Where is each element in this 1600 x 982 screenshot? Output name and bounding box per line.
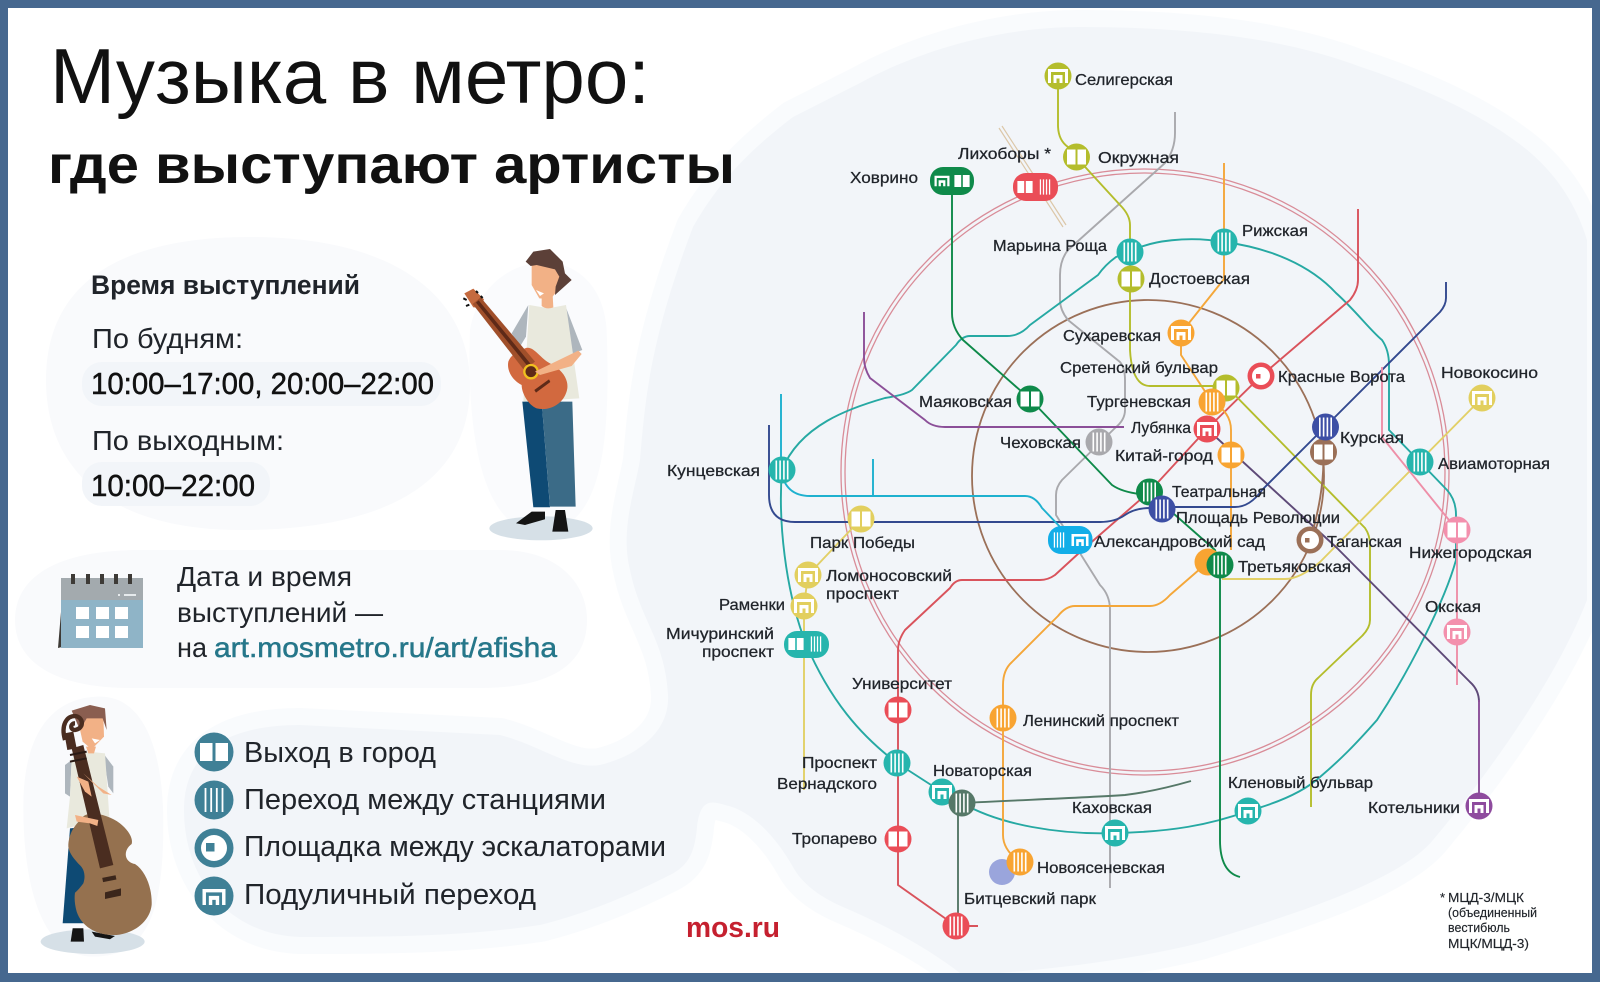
yellow lines xyxy=(804,398,1482,790)
text: weekdays: По будням: xyxy=(92,323,243,354)
station: Проспект Вернадского: Проспект xyxy=(802,755,878,772)
station: Раменки xyxy=(719,592,818,620)
red line xyxy=(898,209,1358,926)
legend item: exit: Выход в город xyxy=(244,737,436,769)
station: Тропарево xyxy=(792,826,912,852)
station: Парк Победы xyxy=(810,506,915,552)
title: где выступают артисты xyxy=(48,135,735,195)
station: Проспект Вернадского xyxy=(777,750,910,793)
grey line xyxy=(1056,112,1175,888)
purple line xyxy=(864,312,1124,427)
station: Авиамоторная: Авиамоторная xyxy=(1438,456,1550,473)
station: Площадь Революции xyxy=(1148,496,1340,527)
station: Мичуринский проспект: Мичуринский xyxy=(666,626,774,643)
icon: calendar xyxy=(58,574,143,648)
cyan line xyxy=(781,394,1063,530)
station: Тургеневская: Тургеневская xyxy=(1087,394,1191,411)
station: Сухаревская xyxy=(1063,320,1194,346)
title: Музыка в метро: xyxy=(50,32,650,120)
station: Кунцевская xyxy=(667,456,796,484)
station: Каховская xyxy=(1072,800,1152,846)
station: Парк Победы: Парк Победы xyxy=(810,535,915,552)
station: Новоясеневская: Новоясеневская xyxy=(1037,860,1165,877)
station: Китай-город: Китай-город xyxy=(1115,448,1214,465)
station: Сухаревская: Сухаревская xyxy=(1063,328,1161,345)
station: Кунцевская: Кунцевская xyxy=(667,463,760,480)
station: Окская: Окская xyxy=(1425,599,1481,616)
station: Третьяковская: Третьяковская xyxy=(1238,559,1351,576)
station: Окская xyxy=(1425,599,1481,646)
station: Окружная: Окружная xyxy=(1098,150,1179,167)
panel: performance time xyxy=(46,237,470,530)
station: Ломоносовский проспект xyxy=(794,562,952,603)
station: Маяковская xyxy=(919,386,1044,412)
blue line xyxy=(769,282,1446,522)
station: Университет: Университет xyxy=(852,676,953,693)
lime line xyxy=(1058,76,1370,807)
station: Окружная xyxy=(1063,144,1179,170)
orange line xyxy=(1003,163,1231,862)
station: Университет xyxy=(852,676,953,724)
station: Лубянка xyxy=(1131,416,1220,442)
dark purple line xyxy=(1207,429,1479,702)
station: Красные Ворота: Красные Ворота xyxy=(1278,369,1405,386)
title xyxy=(48,32,735,195)
station: Марьина Роща xyxy=(993,238,1144,266)
MCD lines xyxy=(999,126,1066,227)
pink line xyxy=(1382,367,1457,685)
station: Лихоборы: Лихоборы * xyxy=(958,146,1051,163)
footnote: (объединенный xyxy=(1448,905,1537,920)
station: Нижегородская xyxy=(1409,516,1532,562)
station: Ломоносовский проспект: Ломоносовский xyxy=(826,568,952,585)
text: date and time note xyxy=(177,561,557,663)
legend item: platform: Площадка между эскалаторами xyxy=(244,831,666,863)
station: Достоевская xyxy=(1118,266,1250,292)
station: Мичуринский проспект xyxy=(666,626,829,661)
station: Селигерская: Селигерская xyxy=(1075,72,1173,89)
station: Кленовый бульвар xyxy=(1228,775,1373,824)
footnote xyxy=(1440,890,1537,951)
station: Таганская xyxy=(1296,526,1402,554)
panel: legend xyxy=(194,732,666,916)
station: Новокосино xyxy=(1441,365,1538,412)
station: Китай-город xyxy=(1115,442,1244,468)
station: Котельники: Котельники xyxy=(1368,800,1460,817)
station: Чеховская xyxy=(1000,428,1112,456)
legend item: underpass: Подуличный переход xyxy=(244,879,536,911)
green line xyxy=(952,181,1240,877)
weekend hours highlight: 10:00–22:00 xyxy=(91,468,255,503)
station: Проспект Вернадского: Вернадского xyxy=(777,776,877,793)
station: Рижская xyxy=(1210,223,1308,256)
station: Битцевский парк: Битцевский парк xyxy=(964,891,1097,908)
station: Нижегородская: Нижегородская xyxy=(1409,545,1532,562)
station: Раменки: Раменки xyxy=(719,597,785,614)
legend item: exit xyxy=(194,732,436,772)
purple line to Kotelniki xyxy=(1478,700,1480,806)
panel: calendar note xyxy=(15,550,587,688)
station: Ленинский проспект xyxy=(990,704,1180,732)
station: Авиамоторная xyxy=(1406,448,1550,476)
station: Котельники xyxy=(1368,792,1492,820)
text: weekends: По выходным: xyxy=(92,425,284,456)
MCC ring xyxy=(841,169,1449,775)
station: Чеховская: Чеховская xyxy=(1000,435,1081,452)
station: Рижская: Рижская xyxy=(1242,223,1308,240)
station: Ховрино xyxy=(850,167,974,195)
station: Новоясеневская xyxy=(989,848,1165,885)
station: Ленинский проспект: Ленинский проспект xyxy=(1023,713,1180,730)
station: Театральная xyxy=(1136,478,1266,506)
station: Курская: Курская xyxy=(1340,430,1404,447)
station: Маяковская: Маяковская xyxy=(919,394,1012,411)
station: Сретенский бульвар: Сретенский бульвар xyxy=(1060,360,1218,377)
station: Мичуринский проспект: проспект xyxy=(702,644,775,661)
teal big circle line xyxy=(781,239,1456,833)
station: Третьяковская xyxy=(1194,548,1351,578)
stations xyxy=(666,62,1550,940)
station: Курская xyxy=(1310,414,1404,466)
station: Таганская: Таганская xyxy=(1327,534,1402,551)
station: Красные Ворота xyxy=(1248,362,1405,390)
legend item: transfer: Переход между станциями xyxy=(244,784,606,816)
text: date and time note: выступлений — xyxy=(177,597,383,628)
station: Александровский сад: Александровский сад xyxy=(1094,534,1266,551)
station: Ломоносовский проспект: проспект xyxy=(826,586,900,603)
station: Театральная: Театральная xyxy=(1172,484,1266,501)
station: Тропарево: Тропарево xyxy=(792,831,877,848)
text: date and time note: на xyxy=(177,632,207,663)
weekdays hours highlight: 10:00–17:00, 20:00–22:00 xyxy=(91,366,434,401)
footnote: МЦД-3/МЦК xyxy=(1448,890,1524,905)
station: Каховская: Каховская xyxy=(1072,800,1152,817)
bass player figure xyxy=(23,697,163,957)
brown ring xyxy=(972,300,1324,652)
station: Новаторская: Новаторская xyxy=(933,763,1032,780)
text: date and time note: art.mosmetro.ru/art/afisha xyxy=(214,632,557,663)
guitarist figure xyxy=(463,249,608,540)
footnote: * xyxy=(1440,890,1445,905)
station: Александровский сад xyxy=(1048,526,1266,554)
logo: mos.ru: mos.ru xyxy=(686,912,780,944)
station: Сретенский бульвар xyxy=(1060,360,1240,402)
station: Новаторская xyxy=(928,763,1032,816)
station: Селигерская xyxy=(1044,62,1173,90)
heading: performance time: Время выступлений xyxy=(91,270,360,300)
footnote: МЦК/МЦД-3) xyxy=(1448,936,1529,951)
station: Новокосино: Новокосино xyxy=(1441,365,1538,382)
station: Кленовый бульвар: Кленовый бульвар xyxy=(1228,775,1373,792)
footnote: вестибюль xyxy=(1448,920,1510,935)
station: Марьина Роща: Марьина Роща xyxy=(993,238,1107,255)
dark line xyxy=(958,781,1191,926)
legend item: underpass xyxy=(194,876,536,916)
station: Площадь Революции: Площадь Революции xyxy=(1176,510,1340,527)
station: Достоевская: Достоевская xyxy=(1149,271,1250,288)
metro lines xyxy=(769,76,1482,926)
text: date and time note: Дата и время xyxy=(177,561,352,592)
brown branch xyxy=(1310,452,1323,540)
station: Тургеневская xyxy=(1087,388,1226,416)
station: Лихоборы xyxy=(958,146,1058,201)
station: Битцевский парк xyxy=(942,891,1097,940)
station: Ховрино: Ховрино xyxy=(850,170,918,187)
station: Лубянка: Лубянка xyxy=(1131,420,1191,437)
